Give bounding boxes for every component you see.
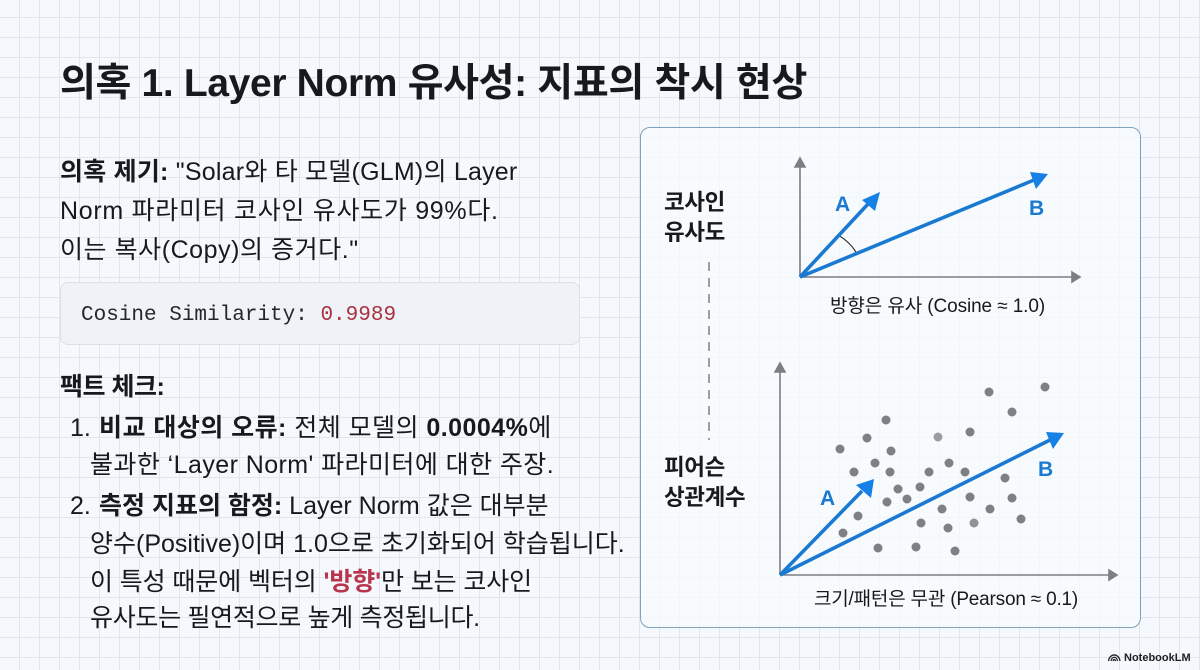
chart: cosine similarity [795,158,1080,282]
list item 1: 불과한 ‘Layer Norm' 파라미터에 대한 주장. [90,451,554,479]
panel: diagram [640,127,1141,628]
label: cosine similarity: 유사도 [664,220,725,245]
list item 2: 양수(Positive)이며 1.0으로 초기화되어 학습됩니다. [90,530,625,558]
scatter dots [836,382,1050,556]
label: cosine similarity: 코사인 [664,190,725,215]
chart: cosine similarity: A [835,193,850,216]
icon: NotebookLM mark [1108,655,1120,661]
logo: NotebookLM: NotebookLM [1124,652,1191,664]
code box: cosine similarity: Cosine Similarity: 0.9989 [81,304,396,327]
text block: allegation [60,158,517,264]
text block: allegation: Norm 파라미터 코사인 유사도가 99%다. [60,197,499,225]
chart: pearson correlation [775,363,1117,580]
chart: cosine similarity: B [1029,197,1044,220]
code box: cosine similarity [60,282,580,345]
heading: fact check: 팩트 체크: [60,373,164,401]
text block: allegation: 이는 복사(Copy)의 증거다." [60,236,359,264]
chart: pearson correlation: B [1038,458,1053,481]
list item 2: 측정 지표의 함정: Layer Norm 값은 대부분 [99,492,549,520]
title: 의혹 1. Layer Norm 유사성: 지표의 착시 현상 [60,62,807,105]
list item 2: 유사도는 필연적으로 높게 측정됩니다. [90,604,480,632]
divider line [708,262,710,440]
list item 1: 비교 대상의 오류: 전체 모델의 0.0004%에 [99,414,552,442]
list item 1: 1. [70,414,91,442]
caption: cosine: 방향은 유사 (Cosine ≈ 1.0) [830,296,1045,317]
list item 2: 2. [70,492,91,520]
text block: allegation: 의혹 제기: "Solar와 타 모델(GLM)의 Layer [60,158,517,186]
label: cosine similarity [664,190,725,245]
list item 2 [70,492,625,632]
label: pearson: 피어슨 [664,455,725,480]
label: pearson: 상관계수 [664,485,745,510]
chart: pearson correlation: A [820,487,835,510]
caption: pearson: 크기/패턴은 무관 (Pearson ≈ 0.1) [814,589,1078,610]
list item 1 [70,414,554,479]
label: pearson [664,455,745,510]
list item 2: 이 특성 때문에 벡터의 '방향'만 보는 코사인 [90,568,532,596]
